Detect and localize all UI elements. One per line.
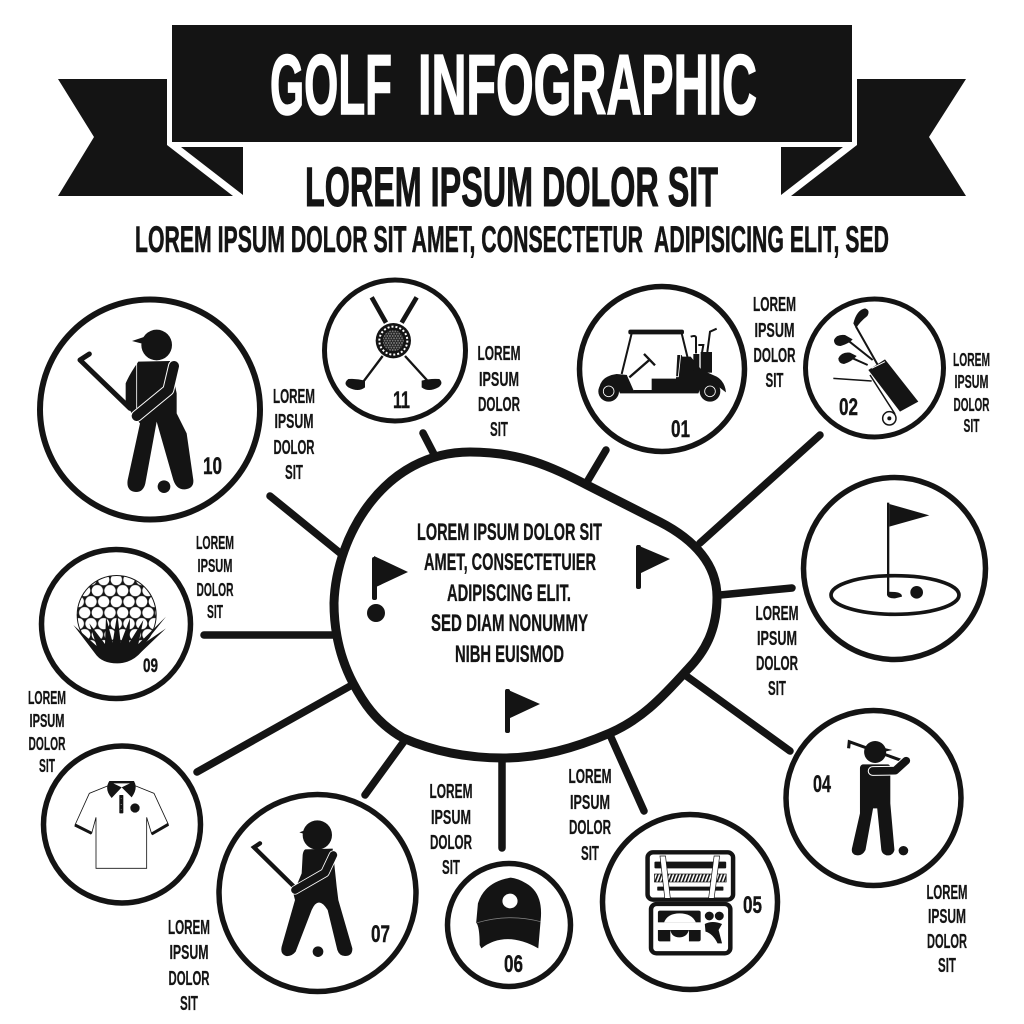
panel: circle 01 golf cart: [580, 286, 744, 452]
label: item 02: SIT: [964, 416, 980, 436]
label: item 06: [430, 781, 472, 879]
label: item 06: IPSUM: [431, 807, 471, 829]
panel: circle 09 golf ball: [42, 550, 190, 698]
icon: cap: [476, 878, 541, 948]
icon: golfer front: [254, 820, 352, 957]
ribbon main band: [172, 25, 852, 142]
central text: LOREM IPSUM DOLOR SIT: [417, 519, 602, 546]
central text: NIBH EUISMOD: [455, 641, 564, 668]
title: INFOGRAPHIC: [418, 38, 757, 133]
label: item 04: IPSUM: [928, 906, 966, 928]
number 01: 01: [671, 416, 690, 443]
label: item 02: DOLOR: [954, 395, 990, 415]
label: item 11: IPSUM: [479, 369, 519, 391]
connectors: [197, 433, 820, 848]
label: item 04: [926, 882, 968, 977]
label: item 03: DOLOR: [756, 653, 798, 675]
icon: golf travel case: [648, 852, 733, 953]
panel: circle 07 golfer: [219, 794, 416, 992]
label: item 03: LOREM: [756, 603, 798, 625]
icon: golf bag trolley: [833, 308, 918, 425]
label: item 07: [168, 917, 210, 1015]
label: item 03: [756, 603, 798, 700]
number 02: 02: [839, 394, 858, 421]
label: item 11: LOREM: [478, 343, 520, 365]
icon: golfer address: [80, 330, 193, 493]
label: item 10: SIT: [285, 462, 303, 484]
label: item 10: [273, 386, 315, 484]
label: item 05: [568, 766, 612, 865]
label: item 08: [28, 688, 66, 776]
label: item 03: SIT: [768, 678, 786, 700]
icon: golfer follow through: [849, 741, 908, 855]
label: item 09: IPSUM: [198, 556, 232, 576]
label: item 11: [478, 343, 520, 441]
label: item 09: DOLOR: [196, 580, 234, 600]
panel: circle 03 flag on green: [804, 478, 986, 660]
label: item 09: LOREM: [196, 533, 234, 553]
icon: polo shirt: [75, 781, 168, 868]
central text: ADIPISCING ELIT.: [447, 580, 571, 607]
central text: [417, 519, 602, 668]
label: item 07: SIT: [180, 993, 198, 1015]
label: item 07: IPSUM: [170, 942, 208, 964]
panel: circle 11 crossed clubs: [324, 280, 466, 421]
label: item 09: [196, 533, 234, 622]
blob outline: [334, 452, 717, 758]
number 07: 07: [371, 921, 390, 948]
label: item 09: SIT: [207, 602, 223, 622]
label: item 02: [953, 350, 990, 436]
label: item 11: SIT: [490, 419, 508, 441]
label: item 03: IPSUM: [757, 628, 797, 650]
panel: circle 08 polo shirt: [44, 746, 200, 903]
number 05: 05: [743, 892, 762, 919]
label: item 05: IPSUM: [570, 792, 610, 814]
label: item 07: DOLOR: [168, 968, 210, 990]
central blob panel: [334, 452, 717, 758]
label: item 08: LOREM: [28, 688, 66, 708]
number 04: 04: [813, 771, 831, 798]
label: item 01: SIT: [766, 370, 784, 392]
icon: flag right: [636, 545, 670, 589]
panel: circle 10 golfer: [40, 300, 260, 520]
label: item 08: IPSUM: [30, 711, 64, 731]
icon: golf ball in grass: [73, 575, 166, 663]
panel: circle 02 golf bag: [806, 299, 944, 437]
label: item 01: DOLOR: [754, 345, 796, 367]
subtitle: LOREM IPSUM DOLOR SIT: [305, 155, 718, 218]
label: item 04: DOLOR: [927, 931, 967, 953]
label: item 01: [753, 294, 796, 392]
label: item 08: DOLOR: [28, 734, 66, 754]
label: item 01: IPSUM: [754, 320, 794, 342]
label: item 06: DOLOR: [430, 832, 472, 854]
label: item 01: LOREM: [753, 294, 796, 316]
label: item 08: SIT: [39, 756, 55, 776]
label: item 10: DOLOR: [274, 437, 315, 459]
label: item 10: IPSUM: [274, 411, 314, 433]
icon: flag on green: [831, 503, 959, 614]
panel: circle 05 travel case: [602, 814, 778, 990]
ribbon right tail: [791, 79, 966, 196]
ribbon right fold: [781, 147, 843, 195]
label: item 06: LOREM: [430, 781, 472, 803]
title: [270, 38, 757, 133]
icon: flag with ball: [367, 556, 408, 622]
icon: crossed clubs and ball: [345, 297, 441, 390]
panel: circle 06 cap: [448, 864, 570, 986]
label: item 02: IPSUM: [954, 372, 988, 392]
label: item 02: LOREM: [953, 350, 990, 370]
banner: [58, 25, 966, 196]
label: item 04: SIT: [938, 955, 956, 977]
ribbon left fold: [181, 147, 243, 195]
number 09: 09: [143, 656, 158, 677]
label: item 10: LOREM: [273, 386, 315, 408]
ribbon left tail: [58, 79, 233, 196]
icon: golf cart: [598, 329, 726, 402]
label: item 05: SIT: [581, 843, 599, 865]
central text: SED DIAM NONUMMY: [431, 610, 588, 637]
label: item 05: LOREM: [568, 766, 612, 788]
icon: flag bottom: [505, 689, 540, 733]
label: item 04: LOREM: [926, 882, 968, 904]
label: item 11: DOLOR: [478, 394, 520, 416]
label: item 05: DOLOR: [569, 817, 611, 839]
label: item 07: LOREM: [168, 917, 210, 939]
title: GOLF: [270, 38, 392, 133]
number 10: 10: [203, 453, 222, 480]
panel: circle 04 golfer swing: [786, 710, 961, 886]
number 11: 11: [393, 387, 410, 414]
central text: AMET, CONSECTETUIER: [424, 549, 596, 576]
number 06: 06: [504, 951, 523, 978]
label: item 06: SIT: [442, 857, 460, 879]
